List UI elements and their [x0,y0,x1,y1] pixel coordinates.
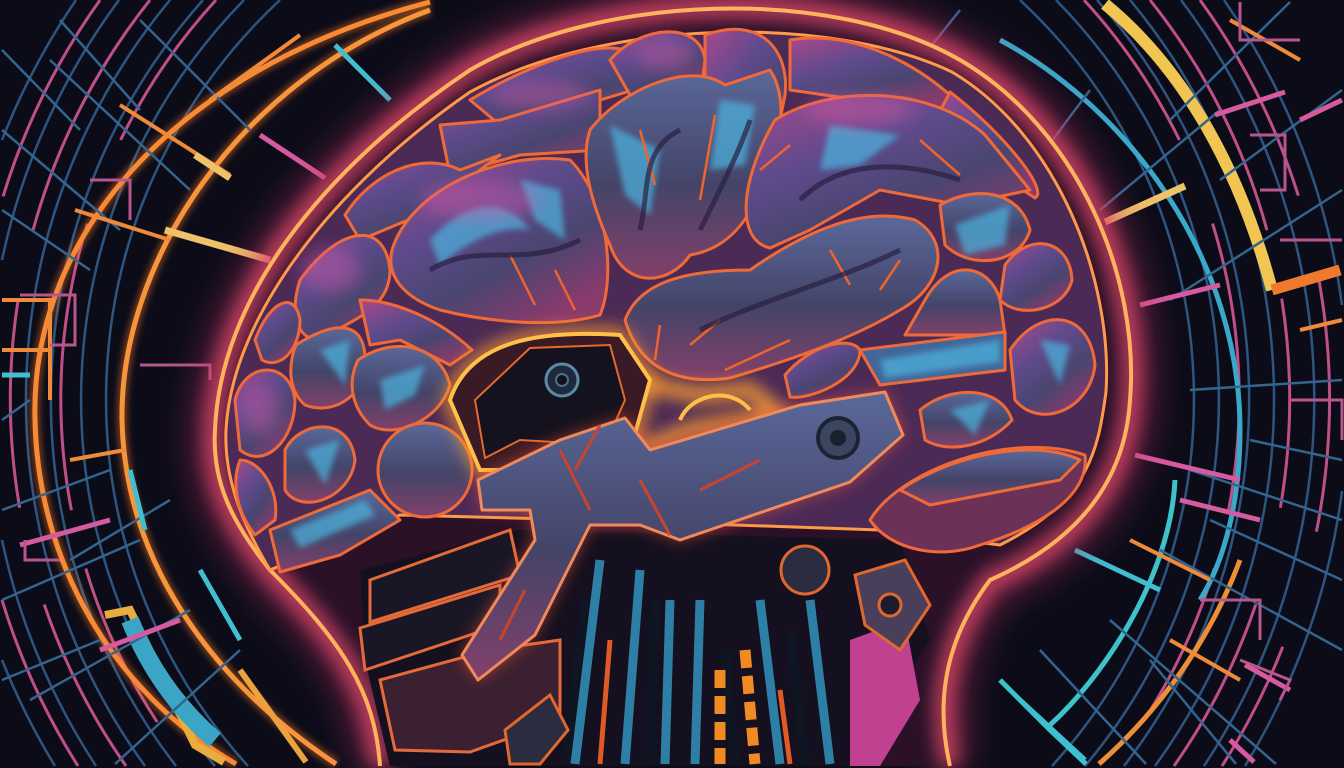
orange arc lower right [1099,560,1240,764]
arm cracks [500,425,760,640]
chip frame [450,334,650,470]
yellow arc top right [1105,4,1272,290]
orange ring inner left [122,10,430,764]
large central sausage lobe [625,216,938,380]
right cluster lobes [940,194,1030,261]
upper right lobe [746,95,1030,248]
inner pink glow [215,9,1131,766]
arm joint centre [830,430,846,446]
dark fold lines [430,120,960,330]
cyan arc right [1000,40,1240,600]
brain base mass [226,32,1107,570]
brain lobes [226,29,1107,572]
mid left lobe [391,158,608,323]
orange stub right [1272,270,1340,290]
orange bar lower left [240,670,306,762]
blue lobe highlights [290,100,1070,548]
cyan arc lower right [1000,480,1175,764]
neck gears [505,546,930,764]
top crest lobes [470,48,650,125]
left cluster lobes [295,235,390,340]
arm glow [462,392,903,680]
chip lens [546,364,578,396]
lower left slab [270,490,400,572]
gold glow loops [625,380,780,450]
lower head machinery [360,530,930,766]
mechanical arm [462,392,903,680]
round temporal lobe [378,423,472,517]
chip glow [450,334,650,470]
pink lobe highlights [240,39,915,436]
cerebellum upper fold [900,450,1080,505]
pink neck panel [850,620,920,766]
outer glow [215,9,1131,766]
implant chip [450,334,650,470]
head fill [215,9,1131,766]
orange ring outer left [35,2,430,764]
arm body [462,392,903,680]
neck cables [565,560,830,764]
central folded lobe [586,70,781,278]
neck cavity [360,530,930,766]
chip lens centre [556,374,568,386]
yellow arc lower left [105,610,224,762]
orange sulci cracks [510,115,960,370]
cyan band lower left [130,620,215,740]
yellow circuit bars [165,155,1185,260]
head silhouette [215,9,1131,766]
chip body [475,345,625,458]
cerebellum [870,447,1085,552]
glowing outline [215,9,1131,766]
arm joint [818,418,858,458]
jaw plates [360,530,560,752]
